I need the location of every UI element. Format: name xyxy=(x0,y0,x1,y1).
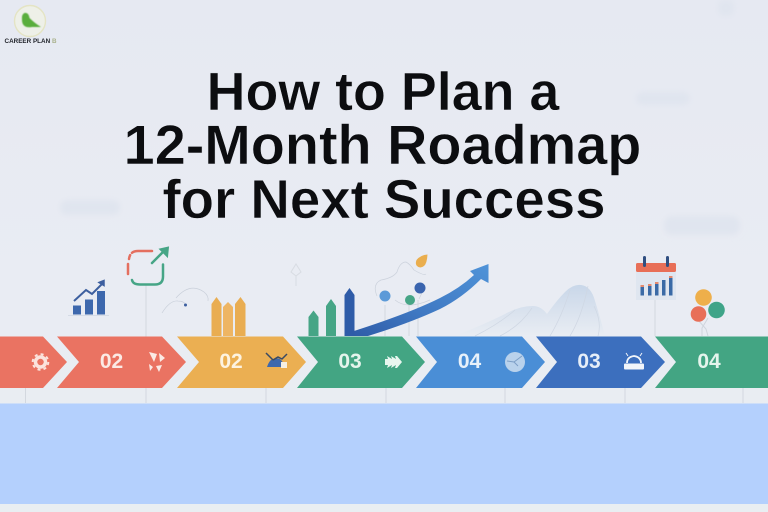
chevron 7 xyxy=(655,336,768,388)
icon: scattered shapes xyxy=(149,352,165,372)
thin connector lines xyxy=(26,285,743,403)
chevron 4 xyxy=(297,336,425,388)
icon: faint kite sketch xyxy=(291,264,301,286)
icon: round chart badge xyxy=(505,352,525,372)
blank blue panel xyxy=(0,404,768,504)
icon: rounded square with growth arrow xyxy=(128,247,168,284)
title: 12-Month Roadmap xyxy=(124,113,641,176)
chevron 4: 03 xyxy=(338,350,362,373)
chevron 2: 02 xyxy=(100,350,123,373)
icon: feathered arrows xyxy=(385,356,402,368)
title: How to Plan a xyxy=(207,62,560,122)
chevron 3: 02 xyxy=(219,350,243,373)
icon: network of dots xyxy=(375,254,430,305)
faint background clouds xyxy=(60,0,740,235)
icon: service bell xyxy=(624,353,644,370)
icon: mountains xyxy=(455,285,605,336)
chevron 7: 04 xyxy=(697,350,721,373)
icon: landscape xyxy=(266,353,287,368)
icon: small bar chart with trend arrow xyxy=(68,280,109,316)
icon: green and blue rising towers xyxy=(308,288,354,336)
timeline chevrons xyxy=(0,336,768,388)
icon: balloons xyxy=(691,289,725,336)
logo: Career Plan B xyxy=(4,6,57,45)
chevron 5: 04 xyxy=(458,350,481,373)
icon: rising blue swoosh arrow xyxy=(354,264,488,336)
icon: gear xyxy=(33,354,48,370)
chevron 2 xyxy=(57,336,186,388)
chevron 3 xyxy=(177,336,306,388)
icon: three orange pencil towers xyxy=(212,297,246,336)
chevron 5 xyxy=(416,336,545,388)
chevron 1 xyxy=(0,336,67,388)
chevron 6: 03 xyxy=(577,350,601,373)
title xyxy=(124,62,641,230)
title: for Next Success xyxy=(162,169,606,230)
logo wordmark: CAREER PLAN B xyxy=(4,38,57,45)
chevron 6 xyxy=(536,336,665,388)
icon: calendar with bars xyxy=(636,256,676,300)
icon: green bird xyxy=(22,13,41,27)
icon: thin dotted sketch xyxy=(162,288,208,313)
